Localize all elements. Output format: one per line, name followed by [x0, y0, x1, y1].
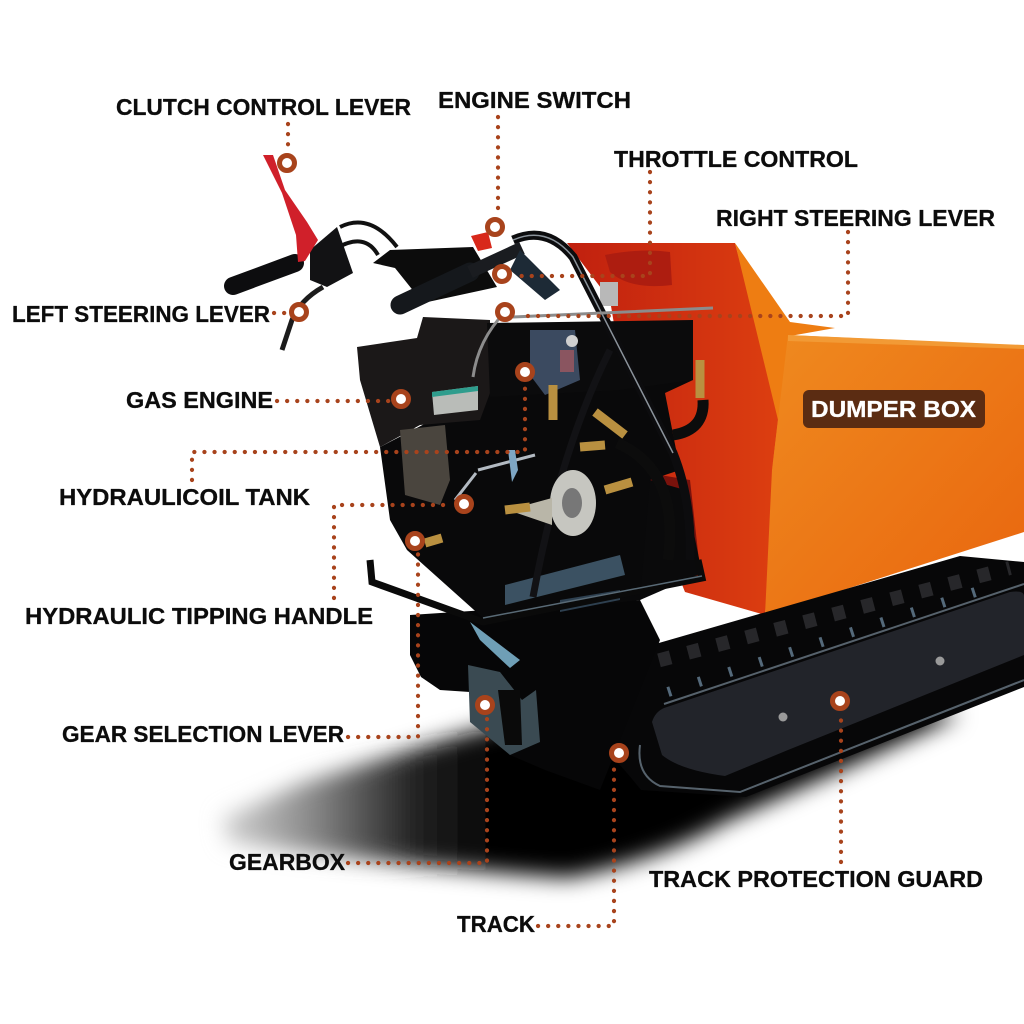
brass fittings	[425, 360, 700, 543]
callout: hydraulic oil tank	[59, 364, 532, 510]
hoses	[673, 400, 703, 435]
right grip	[400, 272, 470, 305]
machine front body	[357, 235, 713, 790]
callout: right steering lever	[498, 205, 995, 320]
handlebar	[233, 155, 560, 350]
track protection guard	[652, 592, 1024, 776]
track rim	[639, 584, 1024, 792]
callout: hydraulic tipping handle	[25, 496, 472, 629]
engine block	[380, 380, 693, 618]
callout: hydraulic oil tank: HYDRAULICOIL TANK	[59, 484, 310, 510]
engine label	[432, 386, 478, 415]
platform	[373, 247, 497, 303]
base plate	[505, 555, 625, 605]
callout: hydraulic tipping handle: HYDRAULIC TIPPING HANDLE	[25, 603, 373, 629]
callout: left steering lever: LEFT STEERING LEVER	[12, 301, 270, 327]
pump	[550, 470, 596, 536]
ground shadow	[222, 690, 960, 878]
track tread teeth	[668, 584, 1000, 692]
left brake lever	[282, 287, 323, 350]
track	[600, 556, 1024, 797]
left control box	[310, 227, 353, 287]
lower right frame bracket	[640, 480, 702, 600]
engine plate	[400, 425, 450, 505]
air filter	[357, 317, 490, 447]
dumper box	[567, 243, 1024, 615]
box side	[765, 335, 1024, 615]
callout: track	[457, 746, 626, 937]
dark red behind frame	[630, 470, 700, 570]
thin rail	[473, 308, 713, 377]
red clutch lever	[263, 155, 318, 262]
left grip	[233, 263, 295, 286]
filler cap	[600, 282, 618, 306]
undercarriage	[410, 600, 660, 790]
callout: gas engine: GAS ENGINE	[126, 387, 273, 413]
callout: track protection guard	[649, 694, 983, 892]
callout: track: TRACK	[457, 911, 535, 937]
callout: engine switch	[438, 87, 631, 234]
callout: track protection guard: TRACK PROTECTION GUARD	[649, 866, 983, 892]
callout: throttle control: THROTTLE CONTROL	[614, 146, 858, 172]
callout: engine switch: ENGINE SWITCH	[438, 87, 631, 113]
box rear red panel	[567, 243, 782, 615]
callout: gear selection lever	[62, 534, 422, 747]
callout: gas engine	[126, 387, 408, 413]
red switch	[471, 232, 492, 251]
callout: gearbox: GEARBOX	[229, 849, 346, 875]
fuel tank	[487, 320, 693, 397]
callout: right steering lever: RIGHT STEERING LEVER	[716, 205, 995, 231]
callout: throttle control	[494, 146, 858, 282]
frame tube	[370, 560, 702, 622]
callout: gearbox	[229, 698, 492, 875]
box top slope	[735, 243, 835, 470]
callout: gear selection lever: GEAR SELECTION LEVER	[62, 721, 344, 747]
label: dumper box	[803, 390, 985, 428]
gearbox	[468, 665, 540, 755]
label: dumper box: DUMPER BOX	[811, 396, 977, 422]
callout: clutch control lever	[116, 94, 411, 170]
callout: clutch control lever: CLUTCH CONTROL LEVER	[116, 94, 411, 120]
